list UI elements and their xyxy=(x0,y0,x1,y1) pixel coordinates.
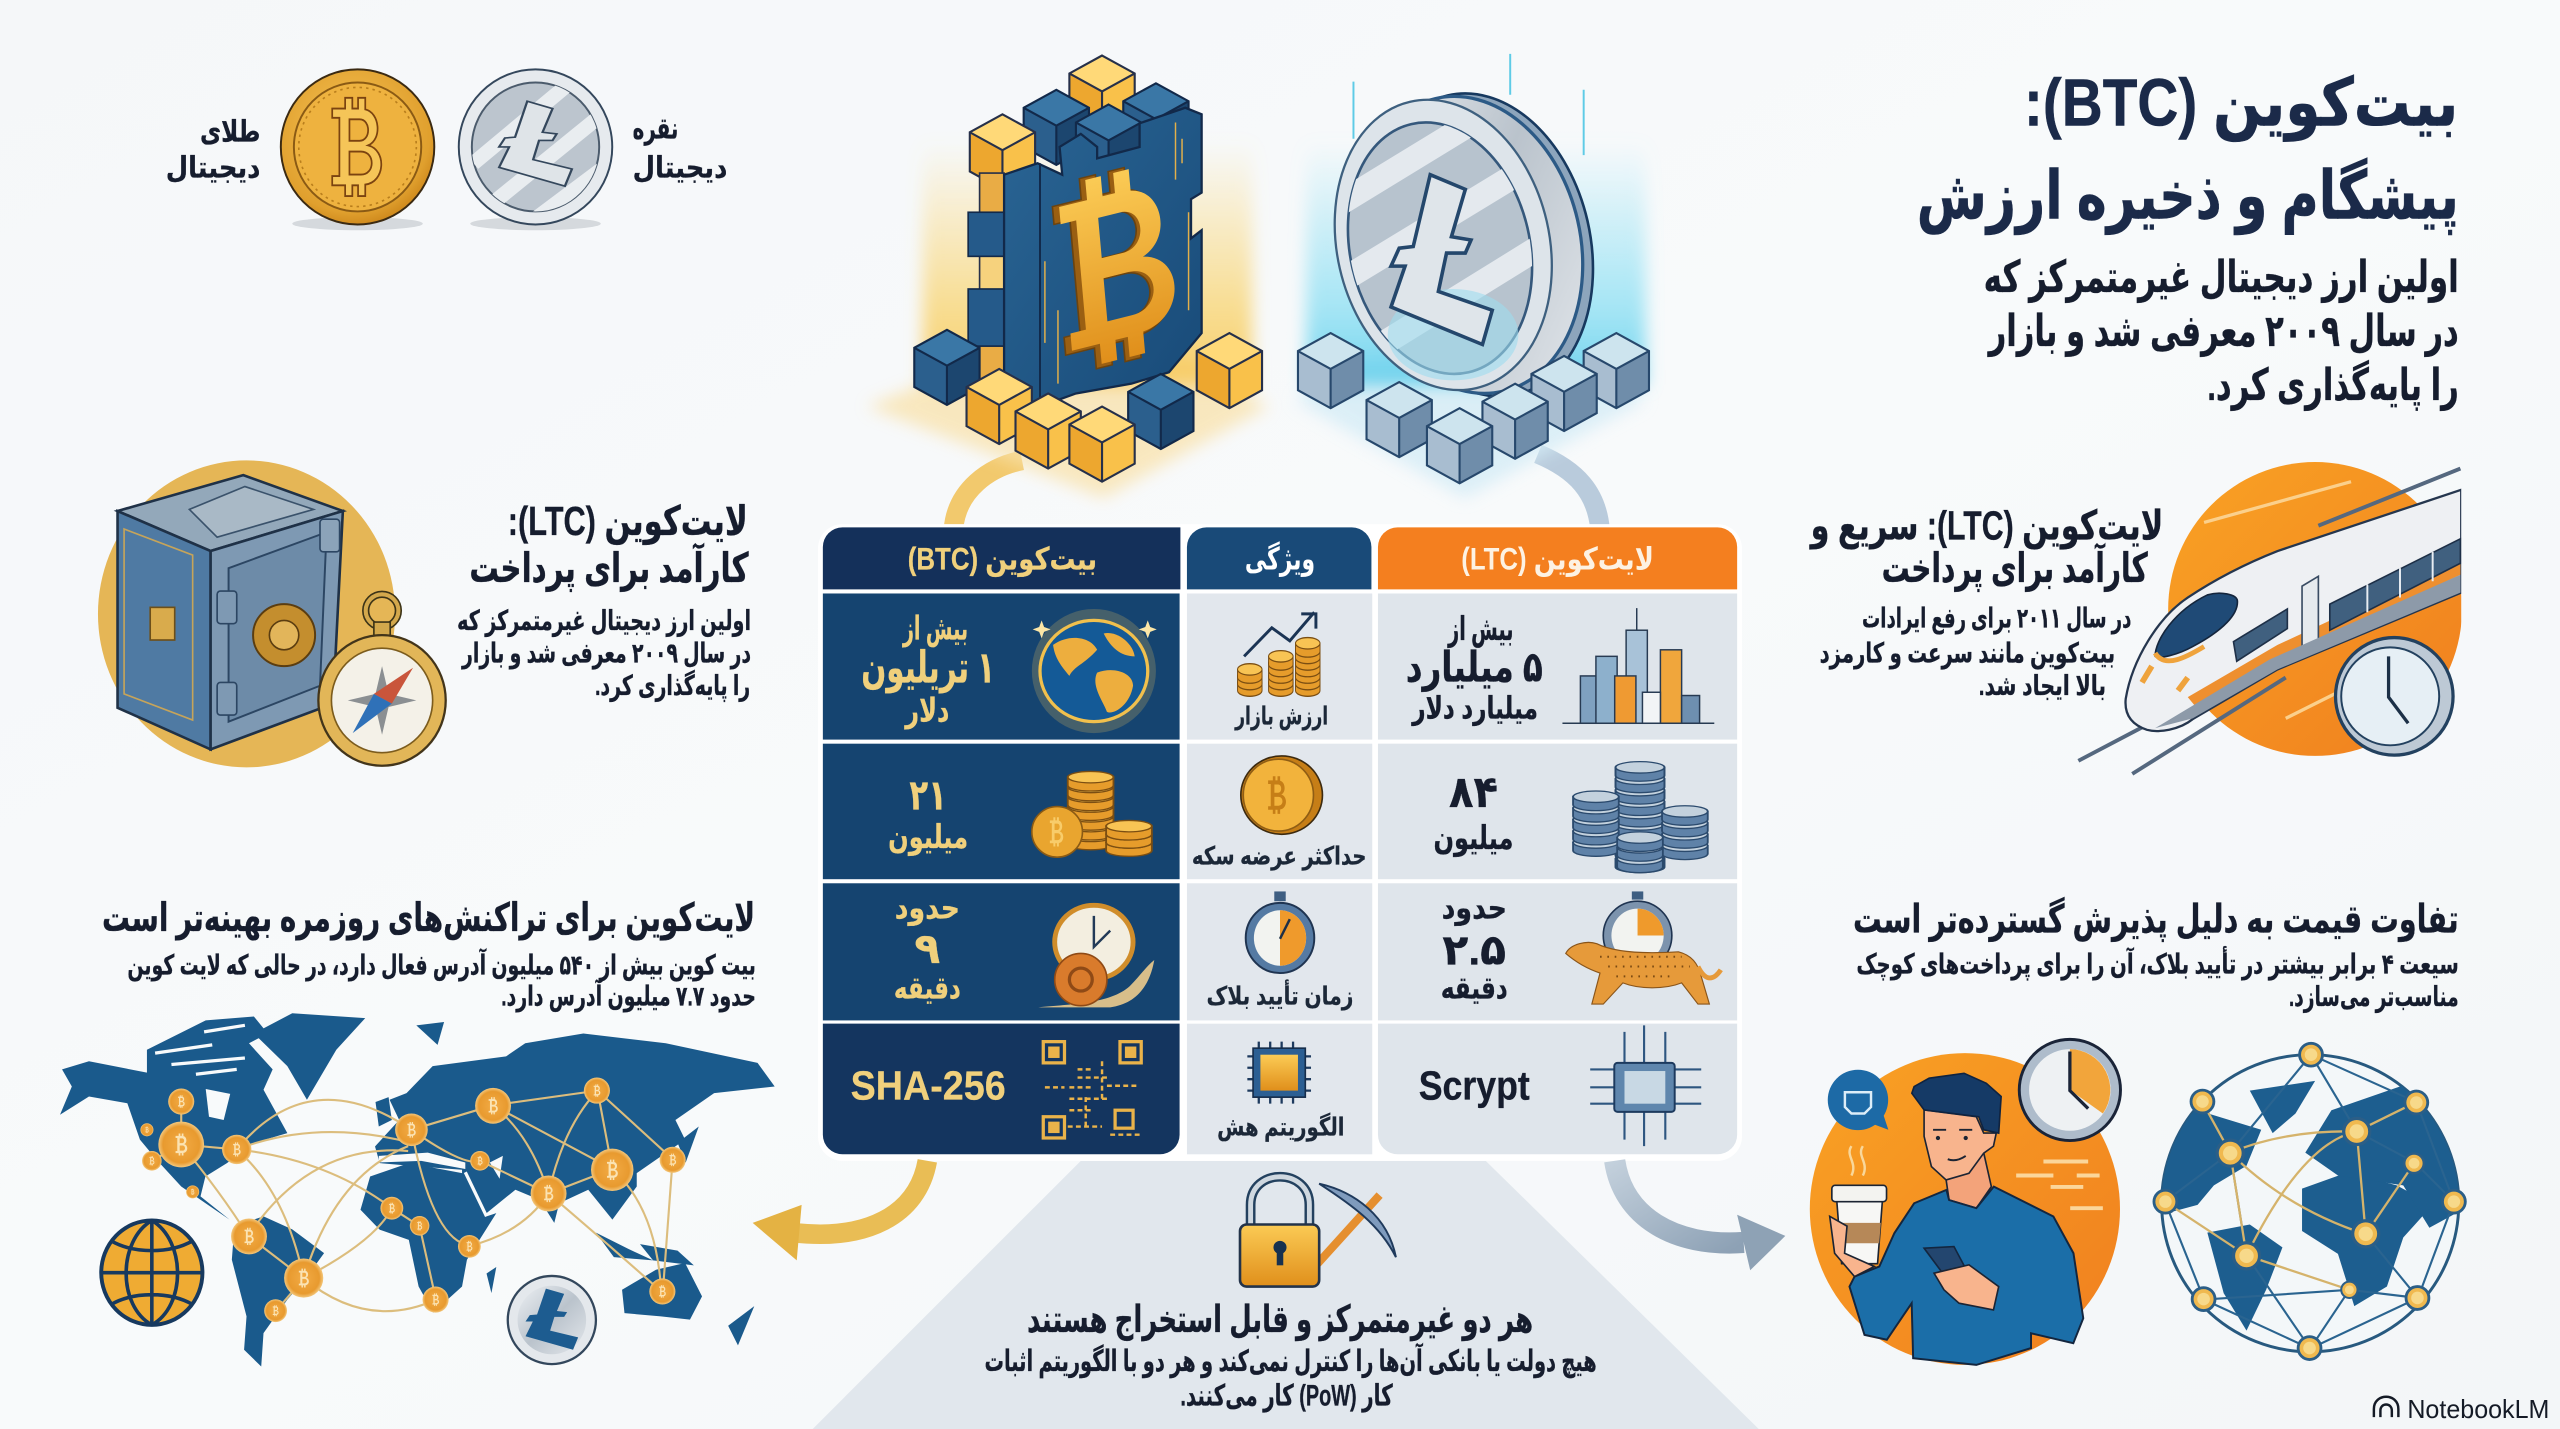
column: feature xyxy=(1187,527,1372,1154)
panel: both decentralized and minable xyxy=(811,1161,1760,1429)
connector: blue arc to table xyxy=(1538,454,1600,529)
body text xyxy=(1856,946,2459,1013)
cell: supply value and silver coins xyxy=(1433,762,1708,873)
row: block time: ۹ xyxy=(914,925,940,972)
phone and hand xyxy=(1924,1247,1999,1310)
cell: supply icon and label: حداکثر عرضه سکه xyxy=(1192,842,1367,871)
cell: market cap icon and label xyxy=(1234,612,1328,731)
row: market cap: دلار xyxy=(904,692,949,730)
heading: بیت‌کوین (BTC): xyxy=(2024,65,2458,142)
cell: block time value and cheetah xyxy=(1441,890,1721,1005)
heading: کارآمد برای پرداخت xyxy=(469,543,749,592)
connector: gold arc to table xyxy=(953,460,1022,529)
intro text: را پایه‌گذاری کرد. xyxy=(2207,359,2459,411)
icon: clock xyxy=(2336,638,2453,755)
body text: بیت کوین بیش از ۵۴۰ میلیون آدرس فعال دارد، در حالی که لایت کوین xyxy=(127,947,756,981)
body text: مناسب‌تر می‌سازد. xyxy=(2289,981,2459,1013)
panel: litecoin better for daily transactions xyxy=(60,897,775,1367)
cell: block time icon and label xyxy=(1207,891,1353,1011)
row: block time: حدود xyxy=(895,890,960,926)
cell: market cap icon and label: ارزش بازار xyxy=(1234,703,1328,731)
illustration: litecoin coin on blocks xyxy=(1295,54,1649,498)
litecoin symbol xyxy=(1391,175,1492,344)
speech bubble xyxy=(1828,1070,1888,1130)
text: digital silver xyxy=(633,112,727,185)
arrow: gold to map xyxy=(753,1161,927,1260)
body text: بالا ایجاد شد. xyxy=(1979,670,2106,701)
logo: NotebookLM: NotebookLM xyxy=(2407,1394,2549,1424)
icon: gold globe xyxy=(101,1220,202,1325)
body text: در سال ۲۰۱۱ برای رفع ایرادات xyxy=(1862,602,2131,634)
text: digital silver: دیجیتال xyxy=(633,152,727,185)
icon: safe xyxy=(98,460,395,767)
panel: litecoin fast and efficient with train xyxy=(1809,462,2462,774)
row: block time xyxy=(823,883,1180,1020)
arrow: grey to person xyxy=(1615,1161,1785,1270)
land cut-outs: bays and seas xyxy=(155,1025,503,1216)
icon: small litecoin xyxy=(508,1276,596,1364)
cell: market cap value and city icon xyxy=(1406,608,1714,726)
row: market cap: ۱ تریلیون xyxy=(861,643,995,693)
network nodes xyxy=(140,1078,686,1322)
neck and face xyxy=(1946,1153,1991,1208)
icon: person with coffee and phone xyxy=(1810,1039,2120,1365)
comparison table xyxy=(818,524,1742,1161)
text: digital gold: دیجیتال xyxy=(166,152,260,185)
row: market cap xyxy=(823,593,1180,740)
cell: hash icon and label xyxy=(1217,1042,1344,1142)
body text: بیت‌کوین مانند سرعت و کارمزد xyxy=(1820,638,2115,670)
row: hash algorithm: SHA-256 xyxy=(851,1063,1006,1109)
coffee cup xyxy=(1830,1146,1887,1277)
row: max supply: میلیون xyxy=(888,818,968,856)
cell: supply value and silver coins: میلیون xyxy=(1433,819,1513,857)
text: digital gold: طلای xyxy=(200,116,260,149)
title block xyxy=(1917,65,2459,411)
wall clock xyxy=(2019,1039,2120,1141)
heading xyxy=(1917,65,2459,235)
bitcoin symbol xyxy=(1051,159,1180,376)
header: litecoin xyxy=(1378,527,1737,589)
intro text xyxy=(1984,253,2459,411)
cell: hash icon and label: الگوریتم هش xyxy=(1217,1111,1344,1142)
cell: block time value and cheetah: حدود xyxy=(1442,890,1507,926)
body text xyxy=(984,1342,1597,1412)
body text: در سال ۲۰۰۹ معرفی شد و بازار xyxy=(461,638,751,670)
text: digital silver: نقره xyxy=(633,112,678,145)
background trapezoid xyxy=(811,1161,1760,1429)
header: bitcoin: بیت‌کوین (BTC) xyxy=(908,542,1097,578)
icon: padlock and pickaxe xyxy=(1240,1177,1396,1287)
cell: market cap value and city icon: میلیارد دلار xyxy=(1411,690,1538,726)
icon: gold coin stacks xyxy=(1032,771,1152,857)
icon: high speed train xyxy=(2078,462,2462,774)
cell: hash value and chip: Scrypt xyxy=(1419,1063,1530,1109)
row: block time: دقیقه xyxy=(894,970,961,1005)
icon: glowing globe xyxy=(1032,609,1157,733)
heading: هر دو غیرمتمرکز و قابل استخراج هستند xyxy=(1027,1298,1533,1341)
icon: compass xyxy=(318,594,446,766)
icon: qr code circuit xyxy=(1043,1042,1143,1138)
cubes in front xyxy=(967,333,1262,482)
header: feature xyxy=(1187,527,1371,589)
intro text: در سال ۲۰۰۹ معرفی شد و بازار xyxy=(1987,307,2459,357)
icon: clock and snail xyxy=(1038,905,1154,1007)
body text: کار (PoW) کار می‌کنند. xyxy=(1180,1379,1393,1412)
body text: حدود ۷.۷ میلیون آدرس دارد. xyxy=(501,978,756,1012)
panel: wider adoption with person and globe xyxy=(1810,897,2465,1365)
heading: لایت‌کوین برای تراکنش‌های روزمره بهینه‌تر است xyxy=(102,897,755,941)
chart: world network map xyxy=(60,1013,775,1367)
text: digital gold xyxy=(166,116,260,185)
tower body xyxy=(1004,108,1202,407)
icon: network globe xyxy=(2154,1043,2465,1360)
cell: block time value and cheetah: ۲.۵ xyxy=(1442,927,1506,974)
cell: market cap value and city icon: بیش از xyxy=(1447,610,1513,648)
sweater xyxy=(1849,1187,2083,1365)
column: bitcoin xyxy=(823,527,1180,1154)
cubes behind tower xyxy=(914,56,1189,405)
illustration: bitcoin blockchain tower xyxy=(867,56,1269,498)
row: hash algorithm xyxy=(823,1024,1180,1154)
cell: hash value and chip xyxy=(1419,1025,1701,1146)
network links xyxy=(152,1091,673,1311)
heading: لایت‌کوین (LTC): سریع و xyxy=(1809,503,2163,551)
cell: supply icon and label xyxy=(1192,756,1367,871)
header: litecoin: لایت‌کوین (LTC) xyxy=(1461,542,1654,578)
row: max supply: ۲۱ xyxy=(909,772,947,819)
heading xyxy=(1809,503,2163,592)
hair xyxy=(1912,1073,2001,1133)
row: max supply xyxy=(823,744,1180,879)
heading xyxy=(469,498,749,592)
header: bitcoin xyxy=(823,527,1180,589)
silver cubes xyxy=(1298,333,1649,483)
body text: را پایه‌گذاری کرد. xyxy=(595,669,750,702)
continents xyxy=(60,1013,775,1367)
body text: هیچ دولت یا بانکی آن‌ها را کنترل نمی‌کند و هر دو با الگوریتم اثبات xyxy=(984,1342,1597,1378)
row: market cap: بیش از xyxy=(902,609,968,647)
cell: block time icon and label: زمان تأیید بلاک xyxy=(1207,980,1353,1011)
column: litecoin xyxy=(1378,527,1737,1154)
cell: block time value and cheetah: دقیقه xyxy=(1441,970,1508,1005)
heading: کارآمد برای پرداخت xyxy=(1882,543,2148,592)
coin rim xyxy=(1343,71,1622,419)
cell: supply value and silver coins: ۸۴ xyxy=(1449,768,1498,817)
body text: اولین ارز دیجیتال غیرمتمرکز که xyxy=(457,605,751,637)
body text xyxy=(127,947,756,1012)
cell: market cap value and city icon: ۵ میلیارد xyxy=(1406,643,1543,691)
icon: litecoin coin xyxy=(459,69,620,230)
heading: لایت‌کوین (LTC): xyxy=(508,498,748,545)
panel: bitcoin store of value with safe xyxy=(98,460,751,767)
icon: digital gold and silver coins xyxy=(166,69,727,230)
body text xyxy=(1820,602,2131,701)
body text xyxy=(457,605,751,702)
icon: bitcoin coin xyxy=(281,69,434,230)
header: feature: ویژگی xyxy=(1245,541,1315,578)
